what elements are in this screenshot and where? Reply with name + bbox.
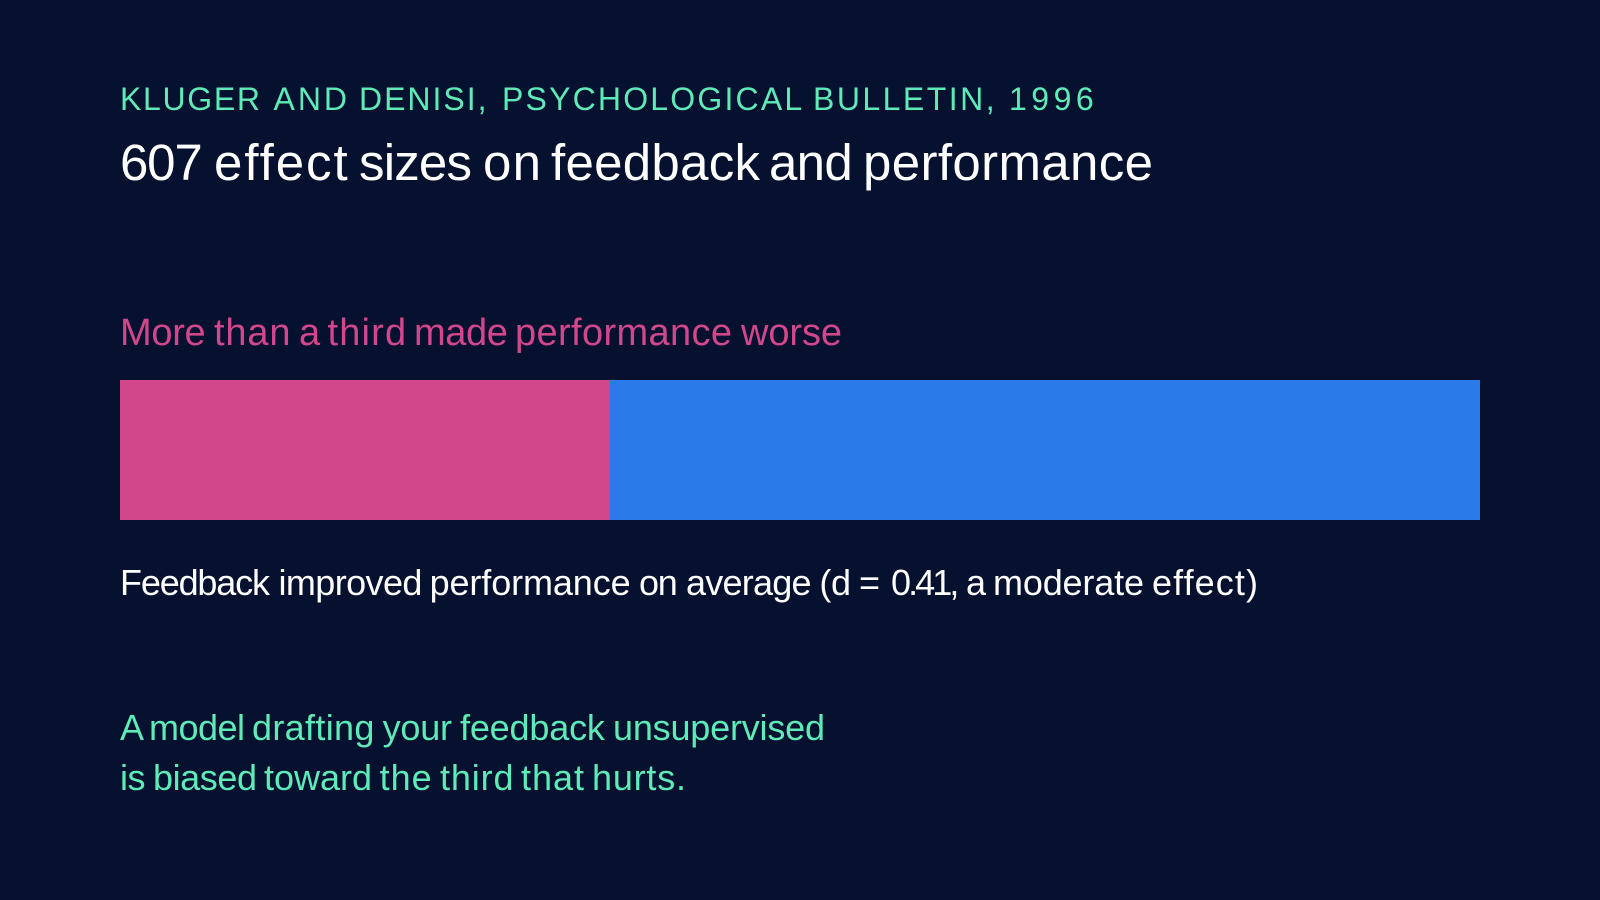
bar caption: 0.41, <box>891 562 959 603</box>
title: sizes <box>359 134 472 191</box>
closing takeaway: feedback <box>460 707 606 748</box>
title: effect <box>214 134 348 191</box>
bar heading: share that hurt: made <box>414 312 508 354</box>
closing takeaway: A <box>120 707 144 748</box>
bar heading: share that hurt: third <box>328 312 406 354</box>
bar caption: performance <box>430 562 631 603</box>
bar caption: improved <box>278 562 422 603</box>
title: on <box>483 134 541 191</box>
closing takeaway: toward <box>264 757 372 798</box>
title: feedback <box>551 134 760 191</box>
bar caption: moderate <box>993 562 1144 603</box>
closing takeaway: is <box>120 757 146 798</box>
eyebrow: source citation: AND <box>274 81 347 117</box>
eyebrow: source citation: 1996 <box>1009 81 1094 117</box>
eyebrow: source citation: DENISI, <box>359 81 486 117</box>
proportion bar <box>120 380 1480 520</box>
bar caption: effect) <box>1152 562 1258 603</box>
closing takeaway <box>120 707 825 798</box>
title: performance <box>863 134 1153 191</box>
closing takeaway: drafting <box>252 707 374 748</box>
bar caption: Feedback <box>120 562 271 603</box>
eyebrow: source citation: BULLETIN, <box>813 81 995 117</box>
bar heading: share that hurt: performance <box>515 312 732 354</box>
bar heading: share that hurt: worse <box>740 312 842 354</box>
bar caption: a <box>966 562 987 603</box>
closing takeaway: the <box>380 757 432 798</box>
bar caption: on <box>639 562 678 603</box>
closing takeaway: biased <box>153 757 257 798</box>
bar segment: made performance worse <box>120 380 610 520</box>
bar caption: average <box>686 562 812 603</box>
bar caption: (d <box>819 562 851 603</box>
bar heading: share that hurt: a <box>299 312 321 354</box>
closing takeaway: that <box>521 757 584 798</box>
eyebrow: source citation: PSYCHOLOGICAL <box>502 81 801 117</box>
closing takeaway: your <box>383 707 452 748</box>
closing takeaway: model <box>149 707 245 748</box>
title: 607 <box>120 134 203 191</box>
bar segment: remainder <box>610 380 1480 520</box>
closing takeaway: hurts. <box>592 757 686 798</box>
eyebrow: source citation: KLUGER <box>120 81 260 117</box>
closing takeaway: unsupervised <box>613 707 825 748</box>
bar heading: share that hurt: More <box>120 312 206 354</box>
bar heading: share that hurt: than <box>214 312 290 354</box>
closing takeaway: third <box>440 757 514 798</box>
title: and <box>769 134 853 191</box>
bar caption: = <box>859 562 880 603</box>
